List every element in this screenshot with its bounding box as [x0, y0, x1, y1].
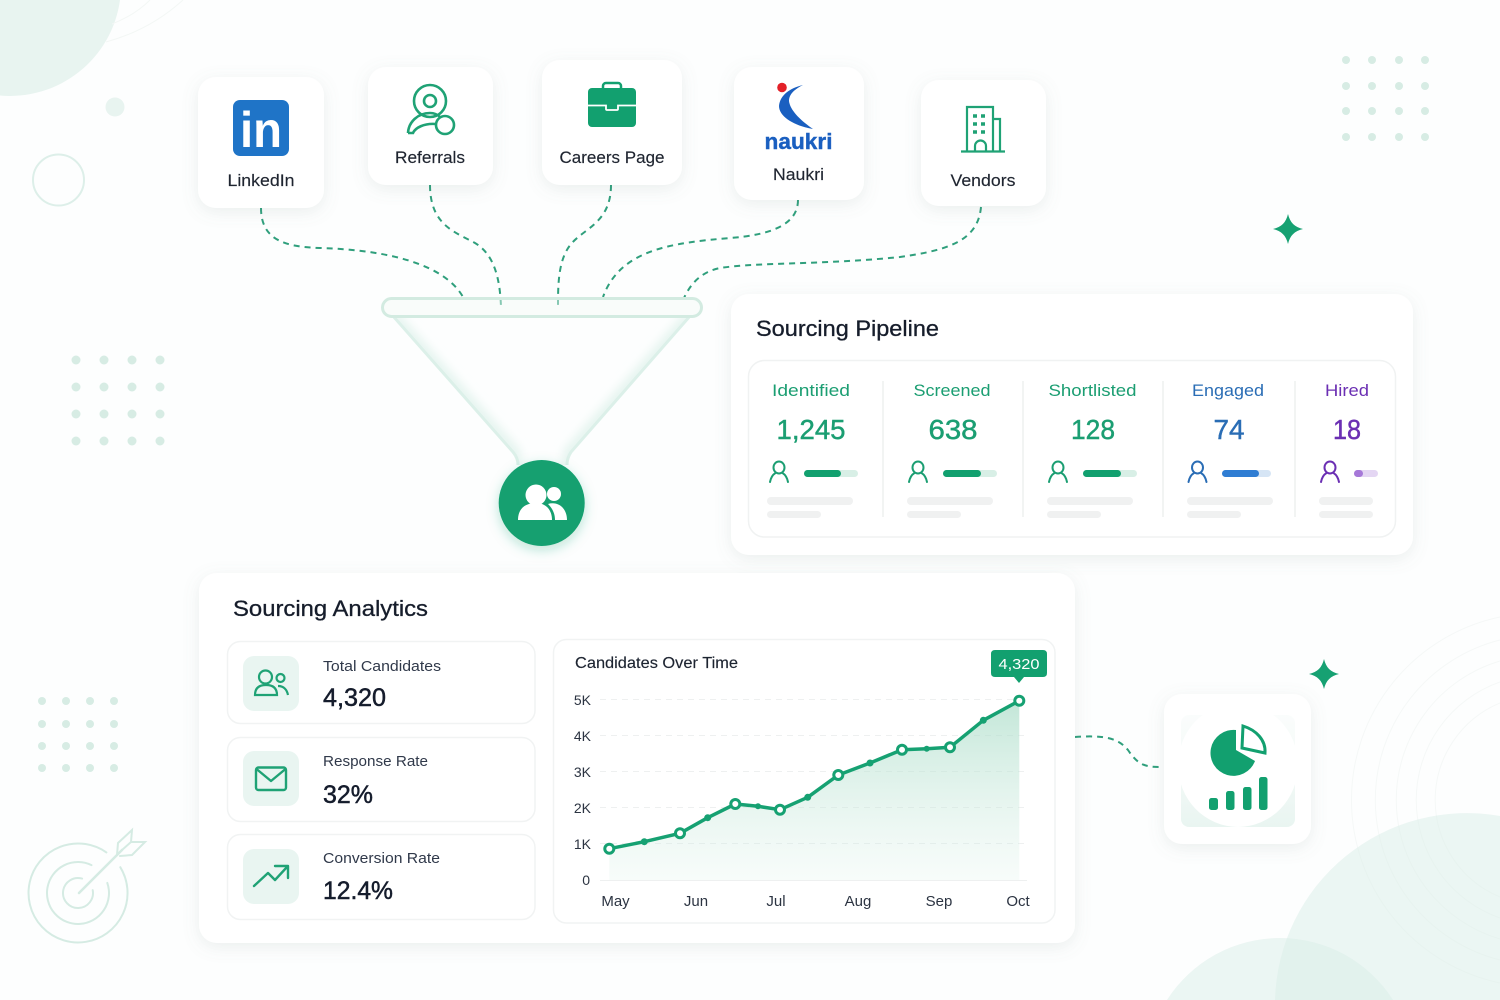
stage: Shortlisted: [1047, 381, 1137, 518]
card: reports icon: [1164, 694, 1311, 844]
metric: Total Candidates: Total Candidates: [323, 658, 441, 675]
funnel: [382, 298, 702, 470]
connector: LinkedIn to funnel: [261, 208, 463, 297]
icon: bar chart: [1209, 777, 1268, 810]
callout: 4,320: 4,320: [998, 656, 1040, 673]
stage: Engaged: [1187, 381, 1273, 518]
y axis labels: 5K: [574, 692, 592, 708]
icon: trending arrow: [254, 866, 288, 886]
x axis labels: Oct: [1006, 893, 1030, 910]
icon: people outline: [255, 670, 288, 695]
icon: LinkedIn logo: in: [240, 102, 282, 158]
heading: Sourcing Pipeline: Sourcing Pipeline: [756, 316, 939, 341]
source card: Careers Page: [542, 60, 682, 185]
x axis labels: May: [601, 893, 630, 910]
stage: Identified: 1,245: [776, 414, 846, 445]
stage: Hired: Hired: [1325, 381, 1369, 400]
icon: office building: [961, 107, 1005, 152]
callout: 4,320: [991, 650, 1047, 683]
stage: Shortlisted: 128: [1071, 414, 1115, 445]
source card: Naukri: [734, 67, 864, 200]
metric: Response Rate: [228, 738, 535, 822]
icon: sparkle top right: [1273, 214, 1303, 244]
x axis labels: [601, 893, 1030, 910]
icon: pie chart: [1210, 726, 1265, 776]
metric: Response Rate: Response Rate: [323, 753, 428, 770]
y axis labels: 1K: [574, 836, 592, 852]
stage: Hired: 18: [1333, 414, 1361, 445]
source card: Vendors: Vendors: [950, 171, 1016, 190]
stage: Engaged: Engaged: [1192, 381, 1264, 400]
icon: target with arrow: [29, 830, 145, 942]
panel: Sourcing Pipeline: [731, 294, 1413, 555]
stage: Screened: Screened: [914, 381, 990, 400]
x axis labels: Jul: [766, 893, 786, 910]
panel: Sourcing Analytics: [199, 573, 1075, 943]
metric: Total Candidates: [228, 642, 535, 724]
funnel output: people circle: [499, 460, 585, 546]
y axis labels: 0: [582, 872, 590, 888]
icon: envelope: [256, 768, 286, 790]
y axis labels: 4K: [574, 728, 592, 744]
metric: Total Candidates: 4,320: [323, 684, 386, 712]
area fill: [609, 701, 1019, 880]
source card: Referrals: Referrals: [395, 148, 465, 167]
stage: Screened: [907, 381, 997, 518]
metric: Conversion Rate: [228, 834, 535, 920]
stage: Engaged: 74: [1214, 414, 1244, 445]
source card: Vendors: [921, 80, 1046, 206]
icon: briefcase: [588, 83, 636, 127]
source card: LinkedIn: [198, 77, 324, 208]
connector: Referrals to funnel: [430, 185, 501, 307]
stage: Hired: [1319, 381, 1378, 518]
chart panel: Candidates Over Time: [554, 640, 1055, 923]
connector: analytics to report icon: [1075, 736, 1160, 767]
connector: Vendors to funnel: [684, 207, 981, 298]
metric: Conversion Rate: 12.4%: [323, 877, 393, 905]
stage: Shortlisted: Shortlisted: [1048, 381, 1136, 400]
source card: Naukri: Naukri: [773, 165, 824, 184]
y axis labels: 3K: [574, 764, 592, 780]
source card: Referrals: [368, 67, 493, 185]
source card: Careers Page: Careers Page: [560, 148, 664, 167]
y axis labels: 2K: [574, 800, 592, 816]
chart title: Candidates Over Time: [575, 655, 738, 672]
y axis labels: [574, 692, 592, 888]
x axis labels: Jun: [684, 893, 708, 910]
icon: people: [518, 484, 567, 520]
connector: Careers Page to funnel: [558, 185, 611, 307]
stage: Identified: Identified: [772, 381, 850, 400]
heading: Sourcing Analytics: Sourcing Analytics: [233, 596, 428, 621]
stage: Screened: 638: [928, 414, 978, 445]
metric: Conversion Rate: Conversion Rate: [323, 850, 440, 867]
icon: sparkle lower right: [1309, 659, 1339, 689]
connector: Naukri to funnel: [603, 200, 798, 297]
metric: Response Rate: 32%: [323, 781, 373, 809]
x axis labels: Sep: [926, 893, 952, 910]
source card: LinkedIn: LinkedIn: [228, 171, 294, 190]
x axis labels: Aug: [845, 893, 871, 910]
icon: Naukri logo: naukri: [764, 129, 832, 154]
stage: Identified: [767, 381, 858, 518]
line series: [605, 696, 1024, 853]
icon: referral person: [408, 85, 454, 134]
